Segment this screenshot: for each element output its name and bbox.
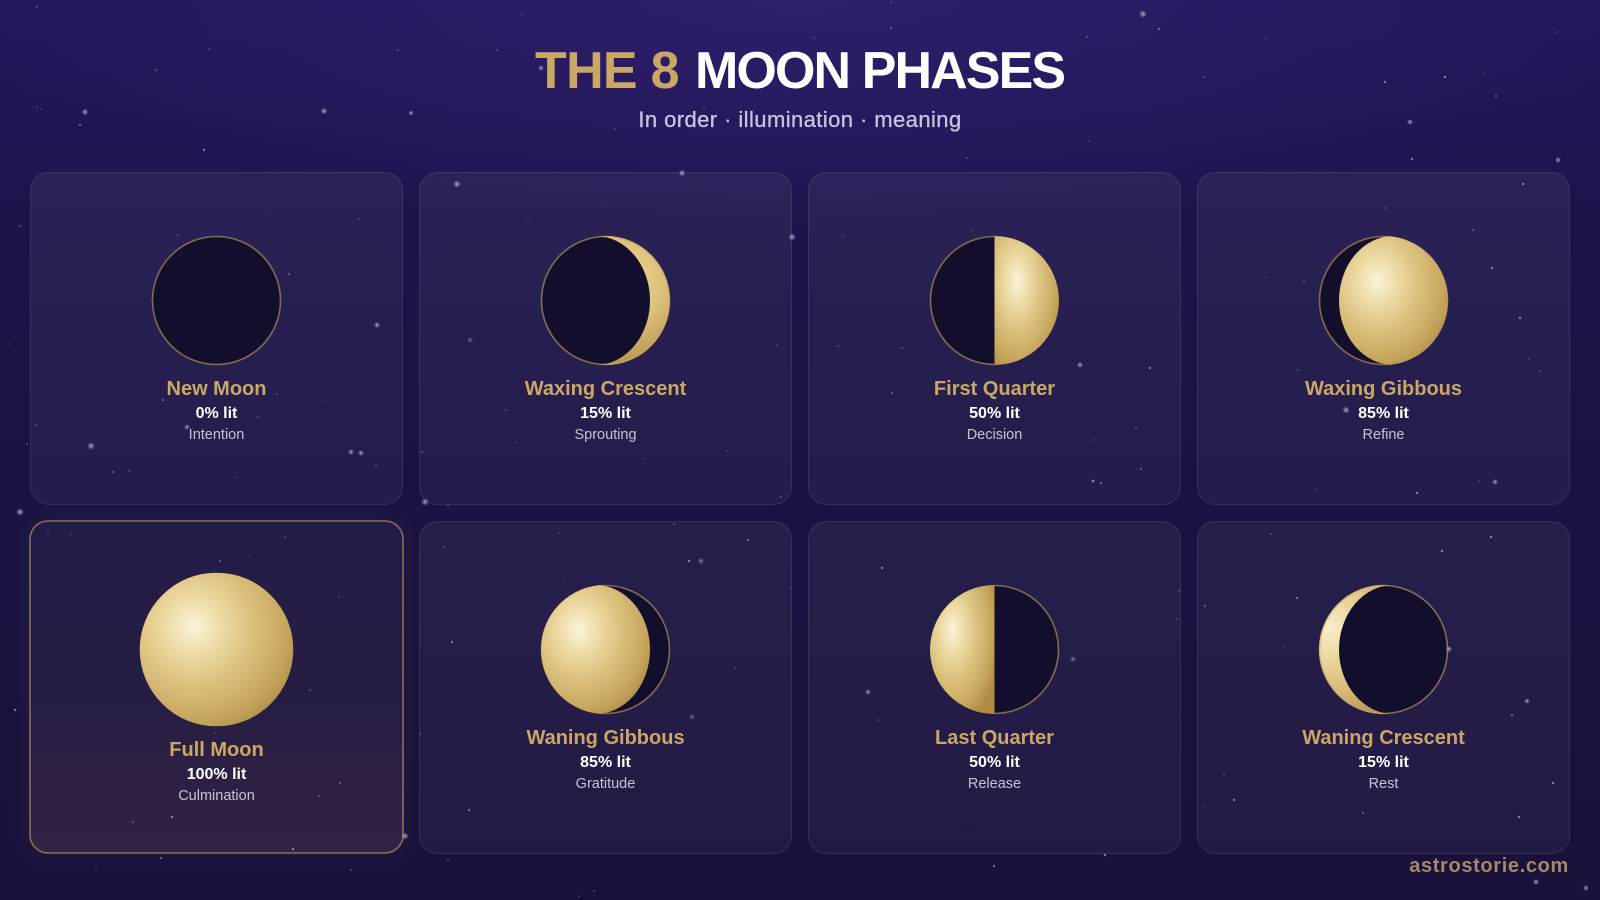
panel: first quarter <box>808 172 1180 504</box>
illumination: 100% lit <box>187 766 247 783</box>
meaning: Sprouting <box>574 427 637 443</box>
subtitle: In order · illumination · meaning <box>638 107 962 132</box>
phase name: Waxing Crescent <box>525 378 687 400</box>
phase name: Full Moon <box>169 739 264 761</box>
phase name: Last Quarter <box>935 727 1054 749</box>
illumination: 85% lit <box>1358 405 1410 422</box>
title: THE 8 <box>535 42 679 100</box>
illumination: 50% lit <box>969 754 1021 771</box>
title: MOON PHASES <box>695 42 1064 100</box>
illumination: 85% lit <box>580 754 632 771</box>
icon: waxing crescent moon <box>541 236 670 365</box>
illumination: 50% lit <box>969 405 1021 422</box>
panel: waxing gibbous <box>1198 172 1570 504</box>
watermark: astrostorie.com <box>1409 855 1569 877</box>
illumination: 0% lit <box>196 405 238 422</box>
panel: last quarter <box>808 522 1180 854</box>
phase name: Waning Gibbous <box>526 727 685 749</box>
panel: waxing crescent <box>420 172 792 504</box>
meaning: Decision <box>967 427 1022 443</box>
meaning: Culmination <box>178 788 255 804</box>
icon: waxing gibbous moon <box>1319 236 1448 365</box>
phase name: Waning Crescent <box>1302 727 1465 749</box>
meaning: Refine <box>1363 427 1404 443</box>
illumination: 15% lit <box>580 405 632 422</box>
icon: full moon <box>140 573 293 726</box>
panel: full moon (highlighted) <box>30 521 403 853</box>
icon: new moon <box>152 236 281 365</box>
meaning: Intention <box>189 427 244 443</box>
meaning: Gratitude <box>576 776 635 792</box>
phase name: New Moon <box>166 378 266 400</box>
panel: waning crescent <box>1198 522 1570 854</box>
meaning: Rest <box>1369 776 1398 792</box>
panel: new moon <box>30 172 402 504</box>
icon: waning gibbous moon <box>541 585 670 714</box>
icon: last quarter moon <box>930 585 1059 714</box>
icon: first quarter moon <box>930 236 1059 365</box>
illumination: 15% lit <box>1358 754 1410 771</box>
panel: waning gibbous <box>420 522 792 854</box>
phase name: Waxing Gibbous <box>1305 378 1462 400</box>
meaning: Release <box>968 776 1021 792</box>
icon: waning crescent moon <box>1319 585 1448 714</box>
phase name: First Quarter <box>934 378 1055 400</box>
